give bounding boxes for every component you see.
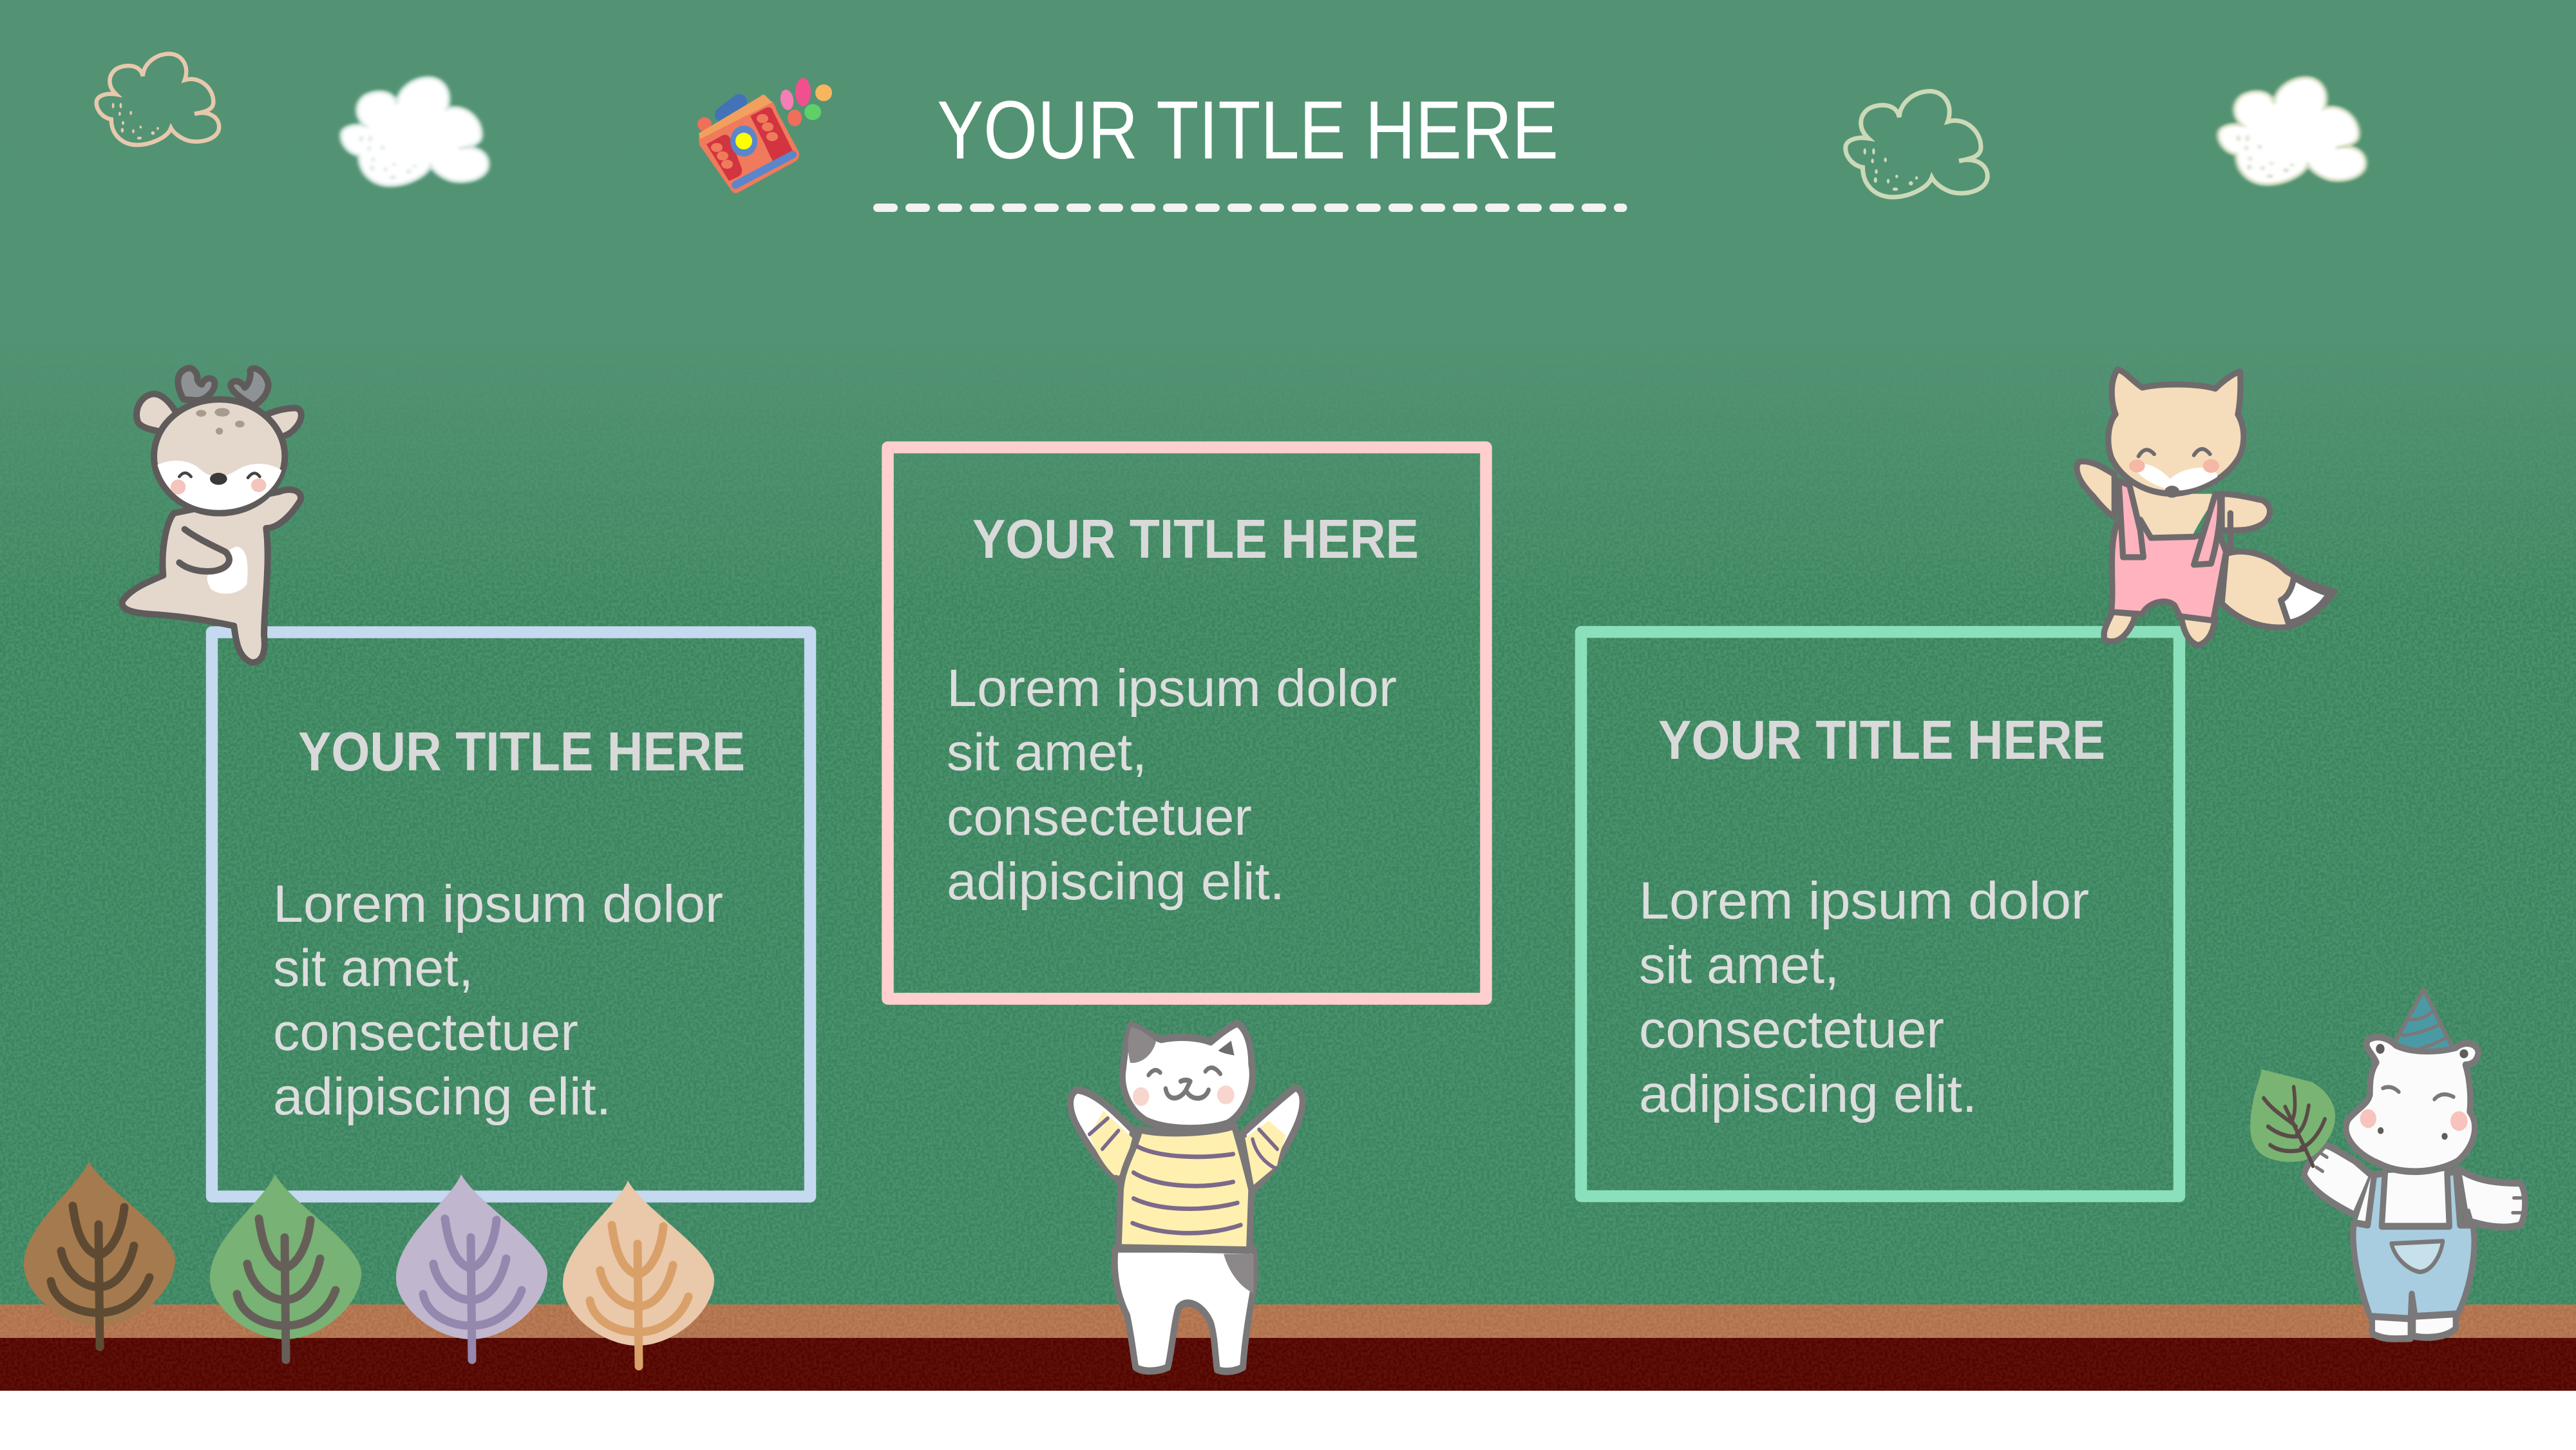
panel: left (blue) [212,633,810,1197]
chalk ledge [0,1304,2576,1339]
left panel body text: sit amet, [273,939,473,997]
centre panel body text: sit amet, [947,723,1147,782]
cloud filled: white left [341,78,488,186]
right panel body text: sit amet, [1639,936,1839,995]
character: fox [2077,369,2334,645]
panel: right (mint) [1581,632,2179,1196]
leaf: brown [24,1161,175,1347]
cloud filled: white right [2219,78,2365,184]
left panel heading: YOUR TITLE HERE [298,721,745,783]
left panel body text: consectetuer [273,1003,578,1062]
panel: centre (pink) [887,447,1486,998]
centre panel body text: adipiscing elit. [947,852,1285,911]
centre panel heading: YOUR TITLE HERE [972,509,1419,570]
left panel body text: Lorem ipsum dolor [273,875,723,933]
icon: toy camera with confetti [697,78,832,193]
right panel body text: Lorem ipsum dolor [1639,872,2089,930]
right panel body text: consectetuer [1639,1000,1944,1059]
right panel heading: YOUR TITLE HERE [1658,710,2105,771]
right panel body text: adipiscing elit. [1639,1065,1977,1123]
character: deer [122,368,301,662]
cloud outline: peach [97,54,219,145]
left panel body text [273,875,723,1126]
centre panel body text: Lorem ipsum dolor [947,659,1397,718]
title dashed underline [877,204,1623,212]
character: cat [1070,1024,1303,1371]
centre panel body text [947,659,1397,911]
leaf: peach [563,1181,714,1366]
right panel body text [1639,872,2089,1123]
centre panel body text: consectetuer [947,788,1252,846]
character: hippo holding a leaf [2250,989,2525,1339]
leaf: green [210,1174,361,1360]
leaf: purple [396,1174,547,1360]
left panel body text: adipiscing elit. [273,1067,611,1126]
main title: YOUR TITLE HERE [937,84,1558,176]
dark floor [0,1338,2576,1391]
cloud outline: sage [1846,91,1987,197]
